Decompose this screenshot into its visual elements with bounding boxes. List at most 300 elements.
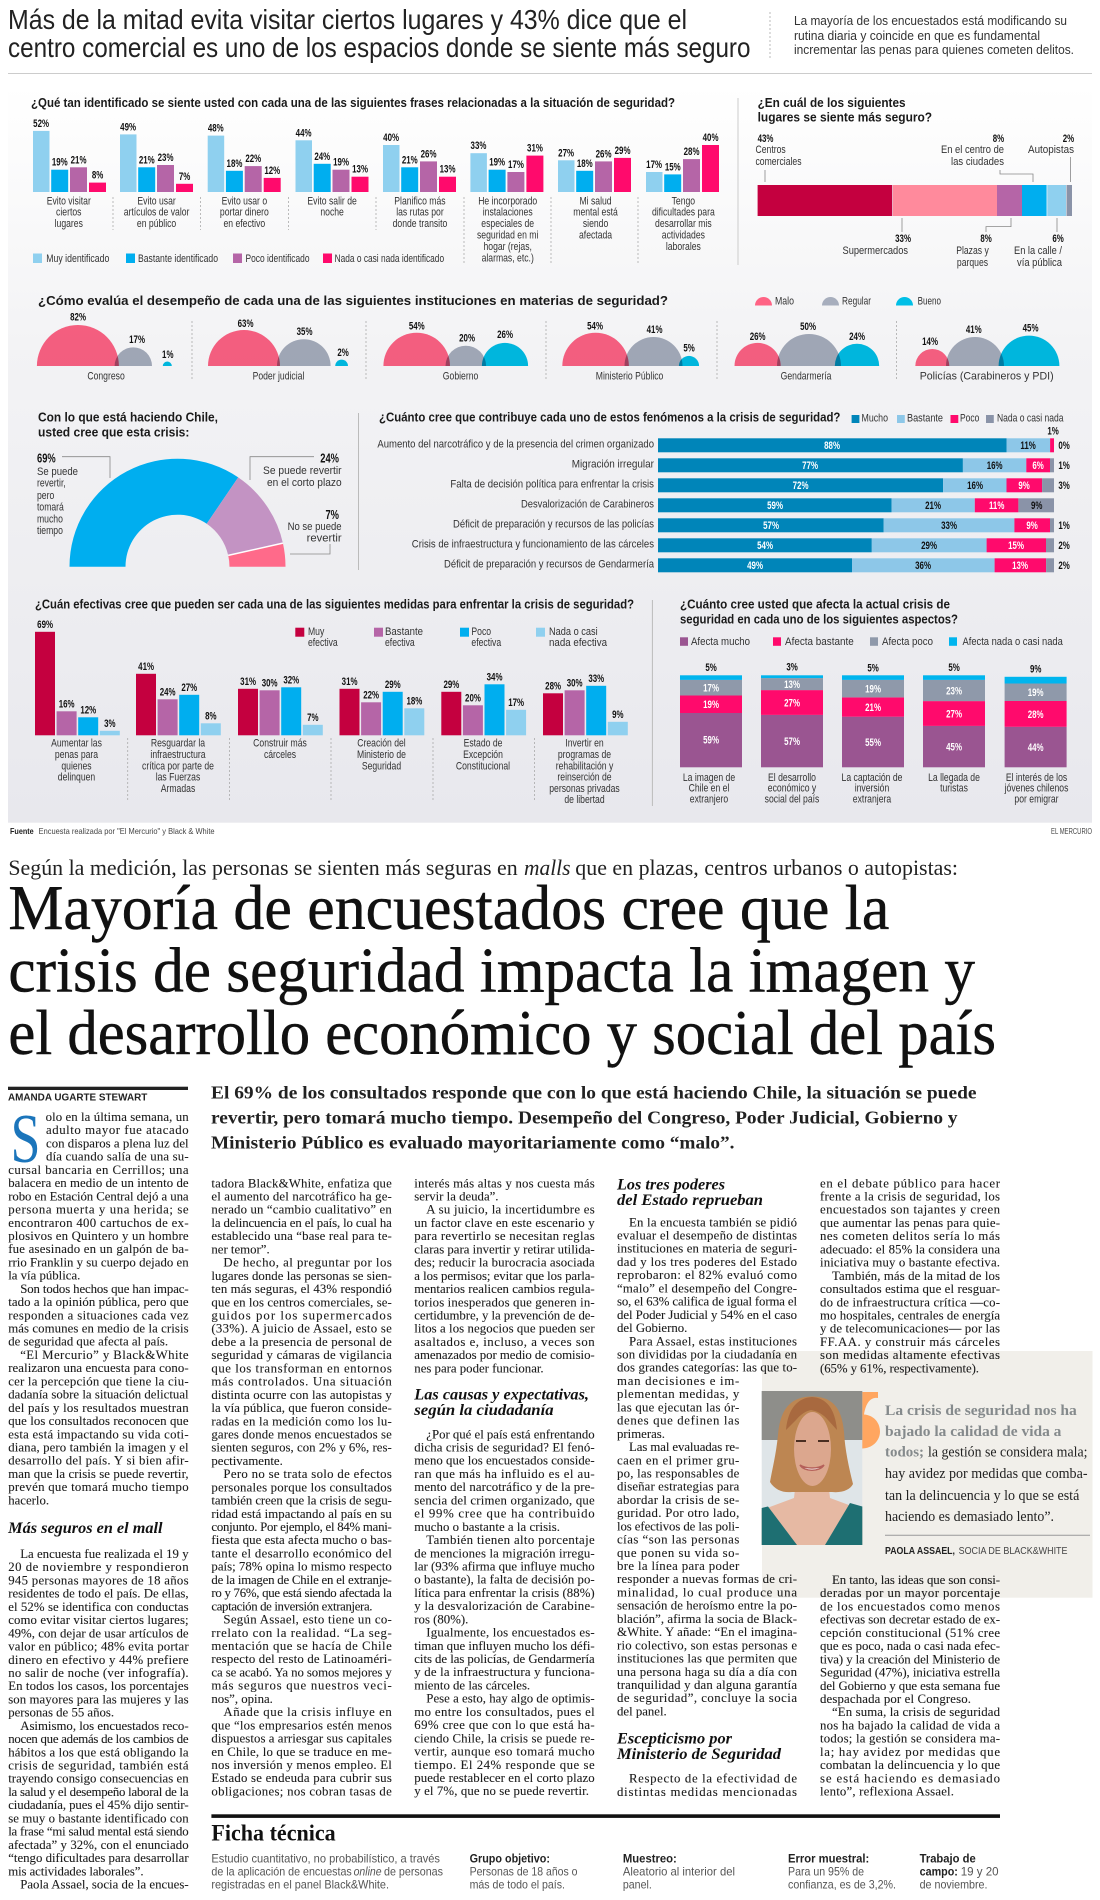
chart: Policías: 45% bbox=[1023, 323, 1039, 335]
column 1 text continued: trayendo consigo consecuencias en bbox=[8, 1772, 189, 1786]
column: imagen de Chile: 19% bbox=[703, 699, 719, 711]
place labels: 6% bbox=[1052, 233, 1064, 245]
row: narcotráfico: 11% bbox=[1020, 440, 1036, 453]
measure category labels: Seguridad bbox=[362, 760, 401, 773]
sheet: fieldwork: campo: bbox=[920, 1865, 958, 1879]
article column 2: que “los empresarios estén menos bbox=[211, 1718, 392, 1732]
bars: Construir más cárceles: 32% bbox=[283, 674, 300, 687]
donut label 24%: Se puede revertir bbox=[263, 465, 342, 477]
bar category labels: en público bbox=[137, 218, 177, 230]
column: llegada de turistas: 5% bbox=[948, 662, 960, 674]
sheet: margin of error: Error muestral: bbox=[788, 1851, 869, 1865]
column 1 text continued: no salir de noche (ver infografía). bbox=[8, 1666, 189, 1680]
article column 5: efectivas son decretar estado de ex- bbox=[820, 1613, 1000, 1627]
infographic source footer: Encuesta realizada por "El Mercurio" y Black & White bbox=[39, 826, 215, 836]
bars: Evito usar artículos de valor: 23% bbox=[158, 152, 174, 164]
row: Gendarmería: 49% bbox=[747, 560, 763, 573]
article column 2: dispuestos a arriesgar sus capitales bbox=[211, 1732, 392, 1746]
measure category labels: crítica por parte de bbox=[142, 760, 214, 773]
article column 4: distintas medidas mencionadas bbox=[617, 1785, 797, 1799]
column: desarrollo económico: 57% bbox=[784, 736, 800, 748]
article column 5: consultados estima que el resguar- bbox=[820, 1282, 1000, 1296]
article column 3: lar (93% afirma que influye mucho bbox=[414, 1560, 595, 1574]
sheet: sampling: Aleatorio al interior del bbox=[623, 1865, 735, 1879]
legend: measures: Bastante bbox=[385, 626, 423, 638]
article column 3: timan que influyen mucho los défi- bbox=[414, 1639, 595, 1653]
article column 4: responder a nuevas formas de cri- bbox=[617, 1572, 797, 1586]
article column 3: servir la deuda”. bbox=[414, 1190, 499, 1204]
bars: Resguardar infraestructura: 41% bbox=[138, 661, 154, 673]
pull quote attribution: PAOLA ASSAEL, bbox=[885, 1545, 955, 1557]
article column 5: “En suma, la crisis de seguridad bbox=[832, 1705, 1001, 1719]
bar category labels: instalaciones bbox=[483, 207, 533, 219]
column 1 text continued: afectada” y 32%, con el enunciado bbox=[8, 1838, 189, 1852]
column 1 text: la vía pública. bbox=[8, 1269, 80, 1283]
legend: aspects: Afecta nada o casi nada bbox=[962, 636, 1063, 648]
place labels: En el centro de bbox=[941, 144, 1004, 156]
article column 2: ro y 76%, que está siendo afectada la bbox=[211, 1586, 392, 1600]
article column 2: de la imagen de Chile en el extranje- bbox=[211, 1573, 392, 1587]
row: migración bbox=[572, 458, 1070, 473]
article column 5: nes cometen delitos sería lo más bbox=[820, 1229, 1000, 1243]
column: desarrollo económico: 3% bbox=[786, 661, 798, 674]
article column 5: También, más de la mitad de los bbox=[832, 1269, 1000, 1283]
drop cap: S bbox=[10, 1101, 40, 1178]
article column 3: el 99% cree que ha contribuido bbox=[414, 1507, 595, 1521]
bars: Tengo dificultades: 15% bbox=[665, 161, 681, 174]
column 1 text continued: “tengo dificultades para desarrollar bbox=[8, 1851, 189, 1865]
row: narcotráfico bbox=[377, 425, 1070, 453]
column 1 text: plosivos en Quintero y un hombre bbox=[8, 1229, 189, 1243]
column 1 text continued: mis actividades laborales”. bbox=[8, 1864, 144, 1878]
legend: identification: Nada o casi nada identificado bbox=[335, 253, 444, 265]
article column 4: del Gobierno. bbox=[617, 1321, 687, 1335]
bars: Invertir en programas: 9% bbox=[612, 709, 624, 721]
row: Carabineros: 21% bbox=[925, 500, 941, 513]
article column 3: lítica para enfrentar la crisis (88%) bbox=[414, 1586, 595, 1600]
article column 2: radas en la medición como los lu- bbox=[211, 1414, 392, 1428]
heading: safest places: lugares se siente más seguro? bbox=[758, 110, 932, 124]
legend: institutions: Bueno bbox=[918, 296, 941, 308]
column 1 text continued: personas de 55 años. bbox=[8, 1706, 114, 1720]
article column 3: mo entre los consultados, pues el bbox=[414, 1705, 595, 1719]
bars: Invertir en programas bbox=[543, 673, 628, 735]
column: desarrollo económico bbox=[761, 661, 823, 806]
row: migración: 1% bbox=[1058, 460, 1070, 473]
chart: Ministerio Público: 54% bbox=[587, 320, 603, 333]
pull quote attribution: SOCIA DE BLACK&WHITE bbox=[959, 1545, 1068, 1557]
article column 2: país; 78% opina lo mismo respecto bbox=[211, 1560, 392, 1574]
donut label 69%: Se puede bbox=[37, 466, 78, 478]
article kicker: que en plazas, centros urbanos o autopistas: bbox=[575, 855, 958, 880]
legend: aspects: Afecta bastante bbox=[785, 636, 854, 648]
panel: crisis reversibility donut bbox=[37, 411, 342, 567]
bars: Resguardar infraestructura: 8% bbox=[205, 710, 217, 723]
row: decisión política: Falta de decisión política para enfrentar la crisis bbox=[450, 479, 655, 491]
bar category labels: las rutas por bbox=[396, 207, 444, 219]
bar category labels: Planifico más bbox=[394, 195, 446, 208]
column 1 text: diana, pero también la imagen y el bbox=[8, 1440, 189, 1454]
article column 3: meno que los encuestados conside- bbox=[414, 1454, 595, 1468]
row: policías: 9% bbox=[1026, 520, 1038, 533]
row: decisión política bbox=[450, 478, 1070, 493]
chart: Gobierno: 54% bbox=[409, 320, 425, 333]
bars: Mi salud mental: 26% bbox=[596, 148, 612, 161]
bar category labels: en efectivo bbox=[223, 218, 266, 230]
infographic background panel bbox=[8, 85, 1092, 823]
bars: Tengo dificultades: 40% bbox=[703, 132, 719, 144]
chart: Congreso: 82% bbox=[70, 312, 86, 324]
bars: Invertir en programas: 30% bbox=[567, 677, 583, 690]
legend: identification: Bastante identificado bbox=[138, 253, 218, 265]
column 1 text continued: 20 de noviembre y respondieron bbox=[8, 1560, 189, 1574]
article column 3: litos a los negocios que pueden ser bbox=[414, 1322, 595, 1336]
bar category labels: Evito usar o bbox=[222, 195, 267, 208]
row: Carabineros: Desvalorización de Carabineros bbox=[521, 499, 655, 511]
bars: Evito usar o portar dinero: 22% bbox=[245, 153, 262, 166]
article column 4: caen en el primer gru- bbox=[617, 1453, 739, 1467]
donut label 69%: pero bbox=[37, 490, 55, 502]
bars: Planifico más las rutas: 40% bbox=[383, 132, 399, 144]
row: Gendarmería: 36% bbox=[915, 560, 931, 573]
bars: Evito visitar ciertos lugares: 52% bbox=[33, 118, 49, 130]
article column 3: y la desvalorización de Carabine- bbox=[414, 1599, 595, 1613]
article column 4: guridad. Por otro lado, bbox=[617, 1506, 739, 1520]
column 1 text continued: son mayores para las mujeres y las bbox=[8, 1692, 189, 1706]
column 1 text: encontraron 400 cartuchos de ex- bbox=[8, 1216, 189, 1230]
byline: AMANDA UGARTE STEWART bbox=[8, 1092, 148, 1104]
column 1 text continued: ciudadanía, pues el 45% dijo sentir- bbox=[8, 1798, 189, 1812]
measure category labels: penas para bbox=[55, 749, 99, 761]
column 1 text: realizaron una encuesta para cono- bbox=[8, 1361, 189, 1375]
bar category labels: Tengo bbox=[672, 195, 695, 208]
place labels: Centros bbox=[755, 144, 786, 156]
donut label 7%: No se puede bbox=[288, 521, 342, 533]
article column 2: seguridad y cámaras de vigilancia bbox=[211, 1348, 392, 1362]
column 1 text: más comunes en medio de la crisis bbox=[8, 1322, 189, 1336]
article column 5: cepción constitucional (51% cree bbox=[820, 1626, 1000, 1640]
bar category labels: Evito visitar bbox=[47, 195, 91, 208]
article column 3: y el 7%, que no se puede revertir. bbox=[414, 1784, 589, 1798]
subhead: Los tres poderes: del Estado reprueban bbox=[617, 1192, 763, 1209]
row: cárceles: 29% bbox=[921, 540, 937, 553]
pull quote text: haciendo es demasiado lento”. bbox=[885, 1509, 1054, 1525]
article column 2: ca se acabó. Ya no somos mejores y bbox=[211, 1665, 392, 1679]
article column 3: 69% cree que con lo que está ha- bbox=[414, 1718, 595, 1732]
article headline: el desarrollo económico y social del país bbox=[8, 998, 996, 1068]
bars: Tengo dificultades: 28% bbox=[684, 146, 700, 159]
article column 5: mo hospitales, centrales de energía bbox=[820, 1308, 1000, 1322]
article column 4: dos grandes categorías: las que to- bbox=[617, 1361, 797, 1375]
heading: reversibility: usted cree que esta crisis: bbox=[38, 426, 189, 440]
article column 4: son divididas por la ciudadanía en bbox=[617, 1348, 798, 1362]
article column 3: de menciones la migración irregu- bbox=[414, 1546, 595, 1560]
legend: phenomena: Bastante bbox=[907, 412, 943, 424]
measure category labels: Constitucional bbox=[456, 760, 510, 773]
article column 3: puede restablecer en el corto plazo bbox=[414, 1771, 595, 1785]
row: Gendarmería: 2% bbox=[1058, 560, 1070, 573]
column 1 text continued: 49%, con dejar de usar artículos de bbox=[8, 1626, 189, 1640]
subhead: Escepticismo por Ministerio bbox=[616, 1730, 782, 1763]
place labels: 43% bbox=[758, 133, 774, 145]
bars: Planifico más las rutas: 21% bbox=[402, 154, 418, 167]
bars: Evito visitar ciertos lugares: 8% bbox=[92, 169, 104, 182]
article column 2: guidos por los supermercados bbox=[211, 1308, 392, 1322]
chart: Poder judicial bbox=[208, 318, 349, 383]
bar category labels: lugares bbox=[55, 218, 83, 230]
row: narcotráfico: 1% bbox=[1047, 425, 1059, 438]
column 1 text continued: se muy o bastante identificado con bbox=[8, 1811, 189, 1825]
chart: Gobierno: 26% bbox=[497, 329, 513, 341]
article column 3: a los permisos; evitar que los parla- bbox=[414, 1269, 595, 1283]
row: Gendarmería: Déficit de preparación y recursos de Gendarmería bbox=[444, 559, 654, 571]
heading: safest places: ¿En cuál de los siguientes bbox=[758, 96, 906, 110]
article column 4: cías “son las personas bbox=[617, 1533, 739, 1547]
column 1 text continued: el 52% se identifica con conductas bbox=[8, 1600, 189, 1614]
column 1 text continued bbox=[8, 1547, 189, 1892]
legend: measures: efectiva bbox=[385, 637, 415, 649]
measure category labels: infraestructura bbox=[150, 749, 206, 761]
column: llegada de turistas: turistas bbox=[940, 783, 968, 795]
article column 4: blación”, afirma la socia de Black- bbox=[617, 1612, 797, 1626]
chart: Policías: 41% bbox=[966, 324, 982, 336]
article column 4: Para Assael, estas instituciones bbox=[629, 1334, 797, 1348]
article column 3: asaltados e, incluso, a veces son bbox=[414, 1335, 595, 1349]
heading: identification: ¿Qué tan identificado se siente usted con cada una de las siguientes frases relacionadas a la situación de seguridad? bbox=[31, 96, 675, 110]
column 1 text: adulto mayor fue atacado bbox=[46, 1123, 189, 1137]
article column 3: tiempo. El 24% responde que se bbox=[414, 1758, 595, 1772]
pull quote text: tan la delincuencia y lo que se está bbox=[885, 1488, 1080, 1504]
chart: Congreso bbox=[37, 312, 174, 383]
legend: measures bbox=[295, 626, 607, 649]
donut label 69%: tiempo bbox=[37, 525, 63, 537]
heading: measures: ¿Cuán efectivas cree que pueden ser cada una de las siguientes medidas para enfrentar la crisis de seguridad? bbox=[35, 597, 634, 611]
donut label 24%: en el corto plazo bbox=[267, 477, 342, 489]
column 1 text continued: Paola Assael, socia de la encues- bbox=[20, 1878, 189, 1892]
byline bbox=[8, 1087, 188, 1104]
column: llegada de turistas: 23% bbox=[946, 685, 962, 698]
measure category labels: Estado de bbox=[464, 738, 502, 750]
article column 5: nos ha bajado la calidad de vida a bbox=[820, 1718, 1000, 1732]
legend: institutions bbox=[755, 296, 941, 308]
row: Gendarmería: 13% bbox=[1012, 560, 1028, 573]
bars: Evito salir de noche: 44% bbox=[296, 127, 312, 140]
chart: Policías bbox=[915, 323, 1059, 382]
bars: Creación del Ministerio: 18% bbox=[406, 695, 423, 708]
half donut chart bbox=[70, 459, 286, 567]
bars: Planifico más las rutas: 13% bbox=[440, 164, 456, 176]
column: jóvenes por emigrar: 19% bbox=[1028, 687, 1044, 699]
chart: Gobierno: Gobierno bbox=[443, 370, 479, 383]
bars: Construir más cárceles: 30% bbox=[262, 677, 278, 690]
article column 3: certidumbre, y la prevención de de- bbox=[414, 1308, 595, 1322]
column 1 text: dadanía sobre la situación delictual bbox=[8, 1388, 189, 1402]
infographic intro text: rutina diaria y coincide en que es fundamental bbox=[794, 29, 1040, 43]
panel: safest places stacked bar bbox=[756, 96, 1075, 269]
bars: Evito usar artículos de valor: 21% bbox=[139, 154, 155, 167]
chart: Gendarmería: Gendarmería bbox=[781, 370, 832, 383]
chart: Policías: 14% bbox=[922, 336, 938, 348]
donut label 24% bbox=[250, 452, 342, 489]
bar category labels: siendo bbox=[583, 218, 609, 230]
donut label 69% bbox=[37, 452, 110, 537]
article column 4: sensación de heroísmo entre la po- bbox=[617, 1599, 797, 1613]
place labels: comerciales bbox=[755, 156, 802, 168]
article column 2: sienten seguros, con 2% y 6%, res- bbox=[211, 1441, 392, 1455]
legend: measures: Poco bbox=[471, 626, 492, 638]
article column 2: nerado un “cambio cualitativo” en bbox=[211, 1203, 392, 1217]
column: jóvenes por emigrar: El interés de los bbox=[1006, 772, 1067, 784]
legend: institutions: Malo bbox=[775, 296, 794, 308]
bar category labels: desarrollar mis bbox=[655, 218, 712, 230]
bars: Aumentar las penas bbox=[35, 619, 120, 735]
column 1 text: persona muerta y una herida; se bbox=[8, 1202, 189, 1216]
bars: Mi salud mental: 18% bbox=[577, 158, 593, 170]
pull quote text: La crisis de seguridad nos ha bbox=[885, 1403, 1077, 1419]
row: decisión política: 16% bbox=[967, 480, 983, 493]
column: jóvenes por emigrar: 28% bbox=[1028, 709, 1044, 721]
bar category labels: Mi salud bbox=[579, 195, 612, 208]
row: policías: 57% bbox=[763, 520, 779, 533]
article column 2: ner temor”. bbox=[211, 1242, 270, 1256]
bars: Evito usar artículos de valor: 49% bbox=[120, 121, 136, 134]
chart: Poder judicial: 35% bbox=[297, 326, 313, 338]
bars: Estado de Excepción: 20% bbox=[465, 692, 481, 705]
legend: aspects bbox=[680, 636, 1063, 648]
pull quote text: la gestión se considera mala; bbox=[928, 1445, 1088, 1461]
bar category labels: especiales de bbox=[481, 218, 534, 230]
article column 3: mucho o bastante a la crisis. bbox=[414, 1520, 560, 1534]
article column 4: las que ejecutan las ór- bbox=[617, 1400, 739, 1414]
column: captación de inversión: 21% bbox=[865, 702, 881, 714]
lead paragraph: El 69% de los consultados responde que con lo que está haciendo Chile, la situación se puede bbox=[211, 1082, 977, 1102]
row: migración: Migración irregular bbox=[572, 459, 654, 471]
article headline bbox=[8, 873, 996, 1068]
article column 4: diseñar estrategias para bbox=[617, 1480, 740, 1494]
article column 4: po, las responsables de bbox=[617, 1466, 740, 1480]
article column 5: que aumentar las penas para quie- bbox=[820, 1216, 1000, 1230]
article column 3: mento del narcotráfico y de la pre- bbox=[414, 1480, 595, 1494]
article column 2: más controlados. Una situación bbox=[211, 1375, 392, 1389]
article column 5: deradas por un mayor porcentaje bbox=[820, 1586, 1000, 1600]
donut label 24%: 24% bbox=[320, 452, 339, 466]
row: migración: 6% bbox=[1032, 460, 1044, 473]
donut label 69%: revertir, bbox=[37, 478, 66, 490]
technical sheet heading: Ficha técnica bbox=[211, 1821, 336, 1846]
chart: Ministerio Público: Ministerio Público bbox=[596, 370, 664, 383]
chart: Gobierno: 20% bbox=[459, 333, 475, 345]
measure category labels: Construir más bbox=[253, 738, 307, 750]
panel: aspects affected bbox=[680, 597, 1068, 806]
heading: reversibility bbox=[38, 411, 218, 440]
article column 2: conjunto. Por ejemplo, el 84% mani- bbox=[211, 1520, 392, 1534]
article column 5: todos; la gestión se considera ma- bbox=[820, 1732, 1000, 1746]
legend: phenomena: Nada o casi nada bbox=[997, 412, 1064, 424]
bars: He incorporado instalaciones bbox=[470, 140, 543, 192]
sheet: target group: más de todo el país. bbox=[470, 1878, 565, 1892]
article column 2: también creen que la crisis de segu- bbox=[211, 1494, 392, 1508]
donut label 7%: 7% bbox=[325, 509, 339, 522]
article column 4: “malo” el desempeño del Congre- bbox=[617, 1281, 797, 1295]
article column 2: la vía pública, que fueron conside- bbox=[211, 1401, 392, 1415]
column 1 text: man que la crisis se puede revertir, bbox=[8, 1467, 189, 1481]
column: llegada de turistas: 27% bbox=[946, 708, 962, 721]
article column 5: de los encuestados como menos bbox=[820, 1599, 1000, 1613]
row: Carabineros: 59% bbox=[767, 500, 783, 513]
column 1 text: fue asesinado en un galpón de ba- bbox=[8, 1242, 189, 1256]
article column 3: para revertirlo se necesitan reglas bbox=[414, 1229, 595, 1243]
heading: aspects: seguridad en cada uno de los siguientes aspectos? bbox=[680, 612, 958, 626]
article column 1 bbox=[7, 1101, 189, 1892]
article column 2: captación de inversión extranjera. bbox=[211, 1599, 372, 1613]
bar category labels: ciertos bbox=[56, 207, 82, 219]
legend: phenomena: Mucho bbox=[862, 412, 888, 424]
article column 3 bbox=[413, 1176, 595, 1798]
legend: measures: efectiva bbox=[308, 637, 338, 649]
column 1 text: desarrollo del país. Y si bien afir- bbox=[8, 1454, 189, 1468]
column 1 text: robo en Estación Central dejó a una bbox=[8, 1189, 189, 1203]
measure category labels: personas privadas bbox=[549, 783, 620, 795]
column: imagen de Chile: Chile en el bbox=[689, 783, 729, 795]
article column 4: primeras. bbox=[617, 1427, 665, 1441]
article column 4: instituciones las que permiten que bbox=[617, 1652, 797, 1666]
sheet: target group bbox=[470, 1851, 578, 1892]
infographic intro text bbox=[794, 14, 1074, 57]
column: captación de inversión bbox=[842, 662, 904, 806]
column: jóvenes por emigrar: 44% bbox=[1028, 742, 1044, 754]
legend: aspects: Afecta mucho bbox=[691, 636, 750, 648]
article column 4: Las mal evaluadas re- bbox=[629, 1440, 739, 1454]
sheet description: de personas bbox=[384, 1865, 443, 1879]
article headline: crisis de seguridad impacta la imagen y bbox=[8, 936, 975, 1006]
article column 3: y de la infraestructura y funciona- bbox=[414, 1665, 595, 1679]
row: decisión política: 9% bbox=[1018, 480, 1030, 493]
article column 3: dicha crisis de seguridad? El fenó- bbox=[414, 1440, 595, 1454]
article column 3: ciendo Chile, la crisis se puede re- bbox=[414, 1731, 595, 1745]
chart: Gendarmería: 26% bbox=[750, 331, 766, 343]
chart: Poder judicial: 63% bbox=[238, 318, 254, 330]
column: desarrollo económico: 13% bbox=[784, 679, 800, 691]
legend: phenomena bbox=[852, 412, 1064, 424]
article column 2 bbox=[211, 1176, 392, 1798]
bars: Estado de Excepción bbox=[441, 671, 526, 735]
article column 5: En tanto, las ideas que son consi- bbox=[832, 1573, 1000, 1587]
chart: Ministerio Público bbox=[562, 320, 699, 383]
bar category labels: seguridad en mi bbox=[477, 230, 538, 242]
subhead: Escepticismo por Ministerio: Escepticismo por bbox=[616, 1730, 733, 1747]
bars: Evito usar o portar dinero: 18% bbox=[227, 158, 243, 170]
article column 4: bre la línea para poder bbox=[617, 1559, 740, 1573]
article column 2: obligaciones; nos cobran tasas de bbox=[211, 1784, 392, 1798]
article headline: Mayoría de encuestados cree que la bbox=[8, 873, 889, 943]
bars: Creación del Ministerio bbox=[340, 676, 424, 735]
bars: Creación del Ministerio: 22% bbox=[363, 689, 379, 702]
infographic title: Más de la mitad evita visitar ciertos lugares y 43% dice que el bbox=[8, 4, 687, 35]
subhead: Las causas y expectativas: Las causas y expectativas, bbox=[413, 1386, 589, 1403]
sheet: fieldwork: de noviembre. bbox=[920, 1878, 988, 1892]
column: jóvenes por emigrar bbox=[1004, 663, 1068, 806]
bar category labels: Evito usar bbox=[137, 195, 176, 208]
measure category labels: reinserción de bbox=[557, 772, 612, 784]
infographic source footer: Fuente bbox=[10, 826, 34, 836]
article column 2: personales porque los consultados bbox=[211, 1480, 392, 1494]
column: desarrollo económico: El desarrollo bbox=[768, 772, 816, 784]
article column 4: del panel. bbox=[617, 1704, 667, 1718]
article kicker: Según la medición, las personas se sienten más seguras en bbox=[8, 855, 518, 880]
pull quote attribution bbox=[885, 1545, 1068, 1557]
article column 5: se está haciendo es demasiado bbox=[820, 1771, 1000, 1785]
row: cárceles bbox=[412, 538, 1070, 553]
